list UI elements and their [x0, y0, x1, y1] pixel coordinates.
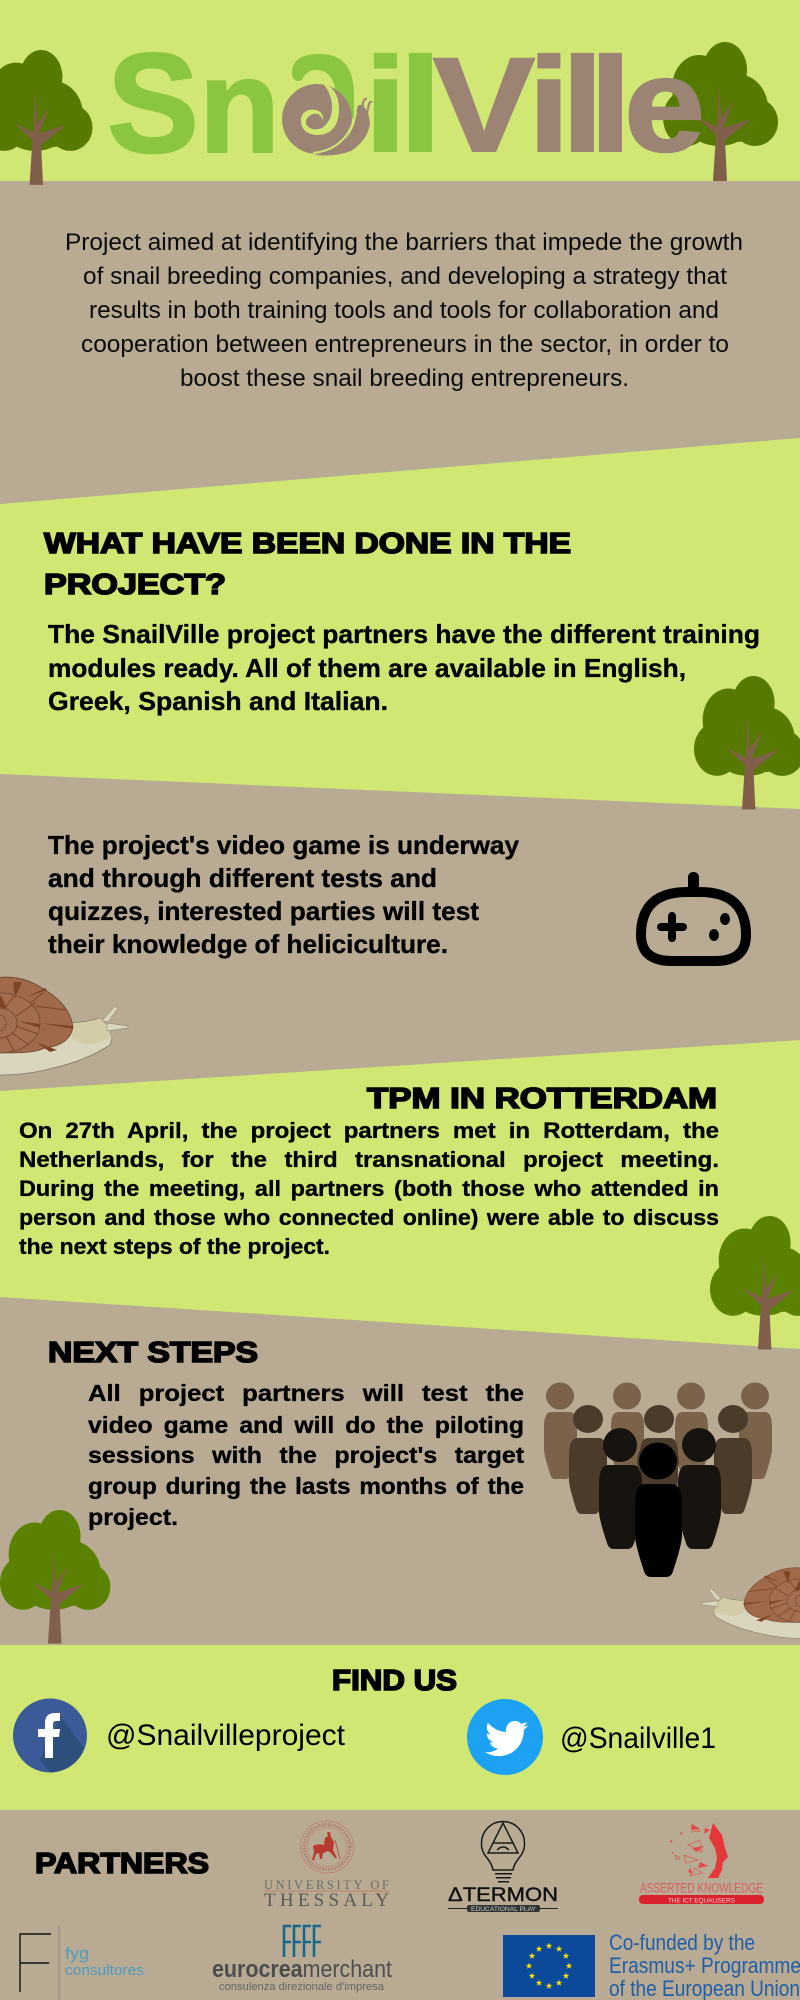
logo: SnailVille: l — [400, 31, 442, 180]
logo: SnailVille — [107, 24, 705, 183]
heading: what have been done: WHAT HAVE BEEN DONE IN THE — [44, 528, 571, 560]
logo: SnailVille: l — [562, 31, 604, 180]
text block: video game: and through different tests and — [48, 863, 437, 893]
illustration: snail left — [0, 977, 128, 1075]
text block: project intro: Project aimed at identifying the barriers that impede the growth — [65, 229, 743, 256]
heading: partners: PARTNERS — [35, 1848, 209, 1880]
heading: what have been done — [44, 528, 571, 601]
icon: group of people — [544, 1382, 772, 1577]
logo: SnailVille: i — [528, 31, 570, 180]
icon: tree bottom left — [0, 1510, 110, 1643]
icon: tree top right — [663, 42, 778, 181]
text block: TPM details — [19, 1118, 719, 1259]
icon: tree top left — [0, 50, 93, 185]
text block: TPM details: During the meeting, all partners (both those who attended in — [19, 1176, 719, 1201]
text block: project intro — [65, 229, 743, 392]
logo: Atermon — [448, 1822, 558, 1913]
heading: TPM in Rotterdam: TPM IN ROTTERDAM — [367, 1083, 717, 1115]
text block: training modules: modules ready. All of them are available in English, — [48, 653, 686, 683]
icon: tree right of training modules — [694, 676, 800, 809]
logo: SnailVille: V — [433, 31, 535, 180]
text block: video game: their knowledge of heliciculture. — [48, 929, 448, 959]
logo: eurocreamerchant: eurocreamerchant — [212, 1956, 392, 1983]
text block: next steps details: sessions with the project's target — [88, 1442, 524, 1468]
logo: SnailVille: i — [364, 31, 406, 180]
text block: project intro: cooperation between entrepreneurs in the sector, in order to — [81, 331, 729, 358]
icon: twitter — [467, 1699, 543, 1775]
logo: Asserted Knowledge: ASSERTED KNOWLEDGE — [640, 1880, 763, 1896]
text block: video game: quizzes, interested parties will test — [48, 896, 479, 926]
text block: video game: The project's video game is underway — [48, 830, 520, 860]
text: co-funded statement: Co-funded by the — [609, 1930, 755, 1955]
text block: next steps details: All project partners will test the — [88, 1380, 524, 1406]
logo: fyg consultores: consultores — [65, 1962, 144, 1979]
text block: project intro: boost these snail breeding entrepreneurs. — [180, 365, 629, 392]
text block: training modules: Greek, Spanish and Italian. — [48, 686, 388, 716]
text block: next steps details — [88, 1380, 524, 1530]
logo: eurocreamerchant — [212, 1926, 392, 1993]
logo: Atermon: EDUCATIONAL PLAY — [471, 1906, 537, 1913]
text block: project intro: results in both training tools and tools for collaboration and — [89, 297, 719, 324]
text block: TPM details: On 27th April, the project partners met in Rotterdam, the — [19, 1118, 719, 1143]
text block: next steps details: project. — [88, 1504, 178, 1530]
logo: eurocreamerchant: consulenza direzionale d'impresa — [219, 1981, 385, 1993]
text: co-funded statement — [609, 1930, 800, 2000]
logo: SnailVille: l — [590, 31, 632, 180]
icon: facebook — [13, 1698, 87, 1772]
text block: TPM details: Netherlands, for the third transnational project meeting. — [19, 1147, 719, 1172]
logo: University of Thessaly: UNIVERSITY OF — [264, 1878, 389, 1892]
text block: TPM details: person and those who connected online) were able to discuss — [19, 1205, 719, 1230]
text block: training modules — [48, 619, 760, 716]
heading: find us: FIND US — [332, 1665, 457, 1697]
text block: video game — [48, 830, 520, 959]
text: facebook handle: @Snailvilleproject — [106, 1719, 346, 1752]
logo: SnailVille: S — [107, 24, 199, 183]
text block: next steps details: group during the lasts months of the — [88, 1473, 524, 1499]
logo: SnailVille: e — [624, 31, 705, 180]
text: twitter handle: @Snailville1 — [560, 1722, 716, 1755]
logo: Atermon: ΔTERMON — [448, 1885, 558, 1906]
logo: EU flag — [503, 1935, 595, 1997]
icon: game controller — [641, 872, 746, 961]
icon: tree right of TPM — [710, 1216, 800, 1349]
logo: University of Thessaly: THESSALY — [264, 1890, 389, 1911]
logo: fyg consultores — [20, 1925, 144, 2000]
heading: what have been done: PROJECT? — [44, 569, 226, 601]
text block: next steps details: video game and will do the piloting — [88, 1412, 524, 1438]
illustration: snail right — [701, 1568, 800, 1638]
text block: project intro: of snail breeding companies, and developing a strategy that — [83, 263, 727, 290]
logo: Asserted Knowledge: THE ICT EQUALISERS — [668, 1898, 736, 1904]
logo: Asserted Knowledge — [639, 1823, 764, 1904]
text block: TPM details: the next steps of the project. — [19, 1234, 330, 1259]
heading: next steps: NEXT STEPS — [48, 1337, 258, 1369]
logo: University of Thessaly — [264, 1821, 389, 1911]
logo: SnailVille: n — [199, 32, 280, 181]
text block: training modules: The SnailVille project partners have the different training — [48, 619, 760, 649]
logo: fyg consultores: fyg — [65, 1944, 89, 1963]
